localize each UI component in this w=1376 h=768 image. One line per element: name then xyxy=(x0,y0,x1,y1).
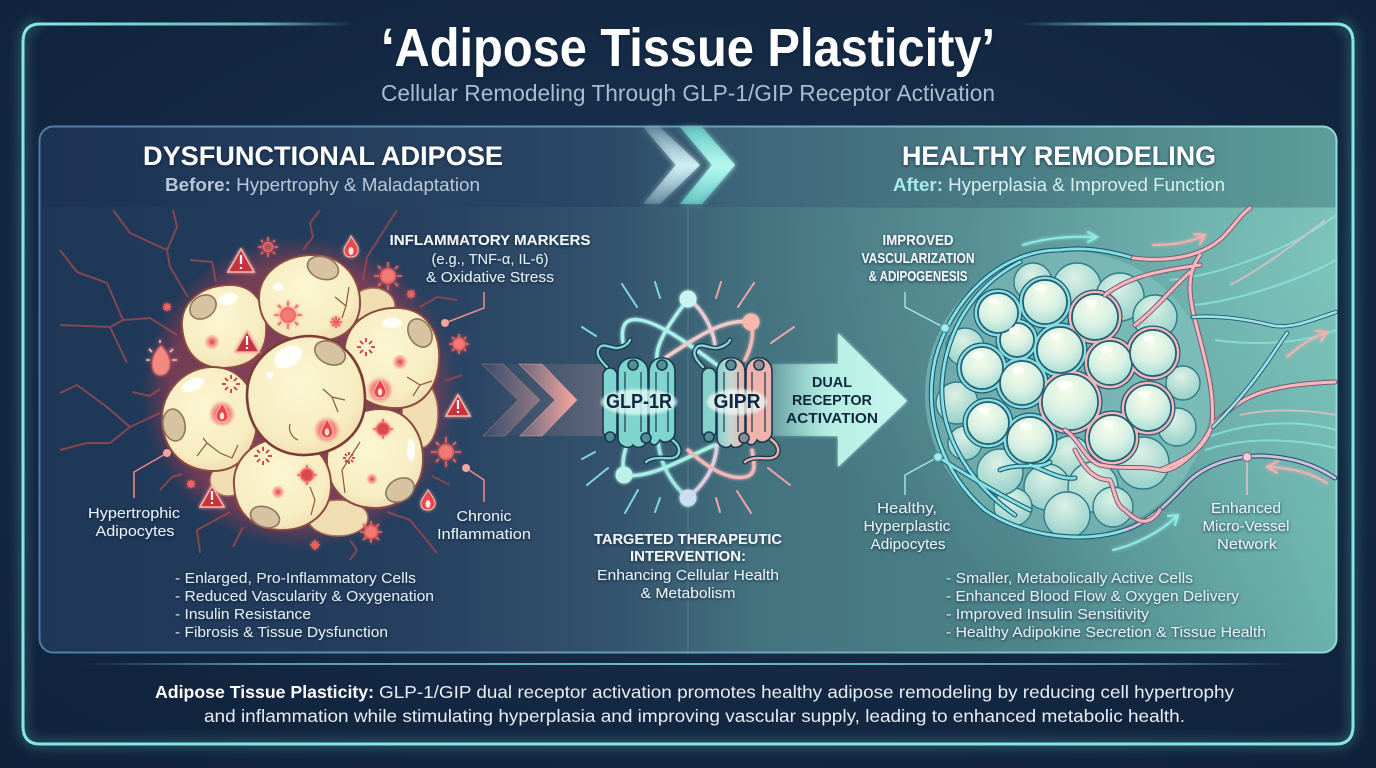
label: enhanced micro-vessel network xyxy=(1202,500,1290,553)
blue vessel network xyxy=(931,249,1335,537)
label: inflammatory markers: INFLAMMATORY MARKERS xyxy=(390,232,590,249)
label: chronic inflammation: Chronic xyxy=(456,508,512,525)
label: healthy hyperplastic adipocytes: Hyperplastic xyxy=(864,518,951,535)
label: healthy hyperplastic adipocytes xyxy=(864,500,951,553)
text block: targeted therapeutic intervention: TARGETED THERAPEUTIC xyxy=(594,531,782,548)
label: improved vascularization: VASCULARIZATION xyxy=(862,250,974,267)
text block: targeted therapeutic intervention: & Metabolism xyxy=(640,585,736,602)
label: improved vascularization: & ADIPOGENESIS xyxy=(868,268,968,285)
label: inflammatory markers: & Oxidative Stress xyxy=(426,269,554,286)
section divider chevrons xyxy=(643,127,735,204)
text block: healthy traits: - Smaller, Metabolically Active Cells xyxy=(946,570,1193,587)
illustration: hypertrophic adipocyte cluster xyxy=(142,236,470,550)
text block: targeted therapeutic intervention: Enhancing Cellular Health xyxy=(597,567,779,584)
back cells xyxy=(210,288,438,536)
connector: enhanced micro-vessel network xyxy=(1242,452,1252,495)
connector: hypertrophic adipocytes xyxy=(134,449,171,498)
footer summary: and inflammation while stimulating hyperplasia and improving vascular supply, leading to enhanced metabolic health. xyxy=(204,706,1185,726)
label: inflammatory markers xyxy=(390,232,590,286)
panel: comparison xyxy=(40,126,1336,652)
label: inflammatory markers: (e.g., TNF-α, IL-6) xyxy=(432,251,548,268)
heading: dysfunctional adipose: DYSFUNCTIONAL ADIPOSE xyxy=(143,141,503,171)
label: healthy hyperplastic adipocytes: Healthy, xyxy=(877,500,937,517)
label: healthy hyperplastic adipocytes: Adipocytes xyxy=(870,536,946,553)
connector: healthy hyperplastic adipocytes xyxy=(905,452,942,495)
label: hypertrophic adipocytes xyxy=(88,505,181,540)
illustration: healthy adipocyte cluster xyxy=(925,208,1336,538)
icon: warning triangles xyxy=(200,249,470,507)
wispy flow lines xyxy=(1170,215,1336,450)
illustration: receptor orbits xyxy=(616,290,760,506)
pink vessel network xyxy=(1065,208,1335,521)
heading: dysfunctional adipose: Before: Hypertrophy & Maladaptation xyxy=(165,175,480,195)
connector: inflammatory markers xyxy=(441,292,484,327)
label: improved vascularization: IMPROVED xyxy=(882,232,954,249)
flow arrows xyxy=(1023,232,1327,550)
icon: inflamed droplet xyxy=(146,340,177,375)
icon: GIPR receptor xyxy=(694,340,778,462)
icon: GLP-1R receptor: GLP-1R xyxy=(606,391,672,413)
text block: dysfunctional traits: - Reduced Vascularity & Oxygenation xyxy=(175,588,434,605)
text block: healthy traits xyxy=(946,570,1266,641)
label: enhanced micro-vessel network: Micro-Vessel xyxy=(1202,518,1290,535)
label: hypertrophic adipocytes: Hypertrophic xyxy=(88,505,181,522)
arrow: incoming chevrons xyxy=(482,364,604,436)
adipocyte: left xyxy=(160,367,257,471)
text block: dysfunctional traits: - Fibrosis & Tissue Dysfunction xyxy=(175,624,388,641)
adipocyte: bottom left xyxy=(234,438,331,532)
text block: healthy traits: - Improved Insulin Sensitivity xyxy=(946,606,1150,623)
decorative activation rays xyxy=(582,282,794,513)
text block: targeted therapeutic intervention: INTERVENTION: xyxy=(630,548,746,565)
label: hypertrophic adipocytes: Adipocytes xyxy=(96,523,174,540)
label: improved vascularization xyxy=(862,232,974,285)
arrow: dual receptor activation xyxy=(772,333,907,467)
heading: healthy remodeling: HEALTHY REMODELING xyxy=(902,141,1216,171)
arrow: dual receptor activation: RECEPTOR xyxy=(792,392,872,409)
heading: healthy remodeling: After: Hyperplasia & Improved Function xyxy=(893,175,1225,195)
back cells xyxy=(936,263,1200,538)
arrow: dual receptor activation: ACTIVATION xyxy=(786,410,878,427)
heading: dysfunctional adipose xyxy=(143,141,503,195)
connector: improved vascularization xyxy=(905,292,950,332)
branching outflow vessel xyxy=(1193,312,1336,427)
heading: healthy remodeling xyxy=(893,141,1225,195)
label: enhanced micro-vessel network: Enhanced xyxy=(1211,500,1281,517)
icon: flames xyxy=(209,236,435,510)
subtitle: Cellular Remodeling Through GLP-1/GIP Receptor Activation xyxy=(381,80,995,106)
footer summary: Adipose Tissue Plasticity: xyxy=(155,682,374,702)
arrow: dual receptor activation: DUAL xyxy=(812,374,852,391)
title: ‘Adipose Tissue Plasticity’ xyxy=(381,18,995,78)
adipocyte: right xyxy=(344,308,439,408)
background tissue cracks xyxy=(60,210,462,560)
vessel rings around cells xyxy=(959,278,1178,465)
connector: chronic inflammation xyxy=(462,464,484,502)
icon: GLP-1R receptor xyxy=(598,340,679,462)
text block: targeted therapeutic intervention xyxy=(594,531,782,602)
icon: inflammatory cytokines xyxy=(163,237,469,550)
adipocyte: centre xyxy=(247,336,365,455)
footer summary xyxy=(155,682,1234,726)
cell highlights xyxy=(972,284,1155,430)
label: chronic inflammation: Inflammation xyxy=(437,526,531,543)
front cells xyxy=(961,280,1176,463)
adipocyte: bottom right xyxy=(327,409,423,508)
icon: GIPR receptor: GIPR xyxy=(714,391,761,413)
text block: dysfunctional traits: - Enlarged, Pro-Inflammatory Cells xyxy=(175,570,416,587)
adipocyte: top xyxy=(259,252,360,341)
text block: dysfunctional traits xyxy=(175,570,434,641)
adipocyte: top left xyxy=(182,285,266,368)
text block: healthy traits: - Enhanced Blood Flow & Oxygen Delivery xyxy=(946,588,1240,605)
icon: dotted stress bursts xyxy=(222,338,375,465)
text block: dysfunctional traits: - Insulin Resistance xyxy=(175,606,311,623)
text block: healthy traits: - Healthy Adipokine Secretion & Tissue Health xyxy=(946,624,1266,641)
label: enhanced micro-vessel network: Network xyxy=(1217,536,1278,553)
label: chronic inflammation xyxy=(437,508,531,543)
footer summary: GLP-1/GIP dual receptor activation promotes healthy adipose remodeling by reducing cell hypertrophy xyxy=(379,682,1234,702)
